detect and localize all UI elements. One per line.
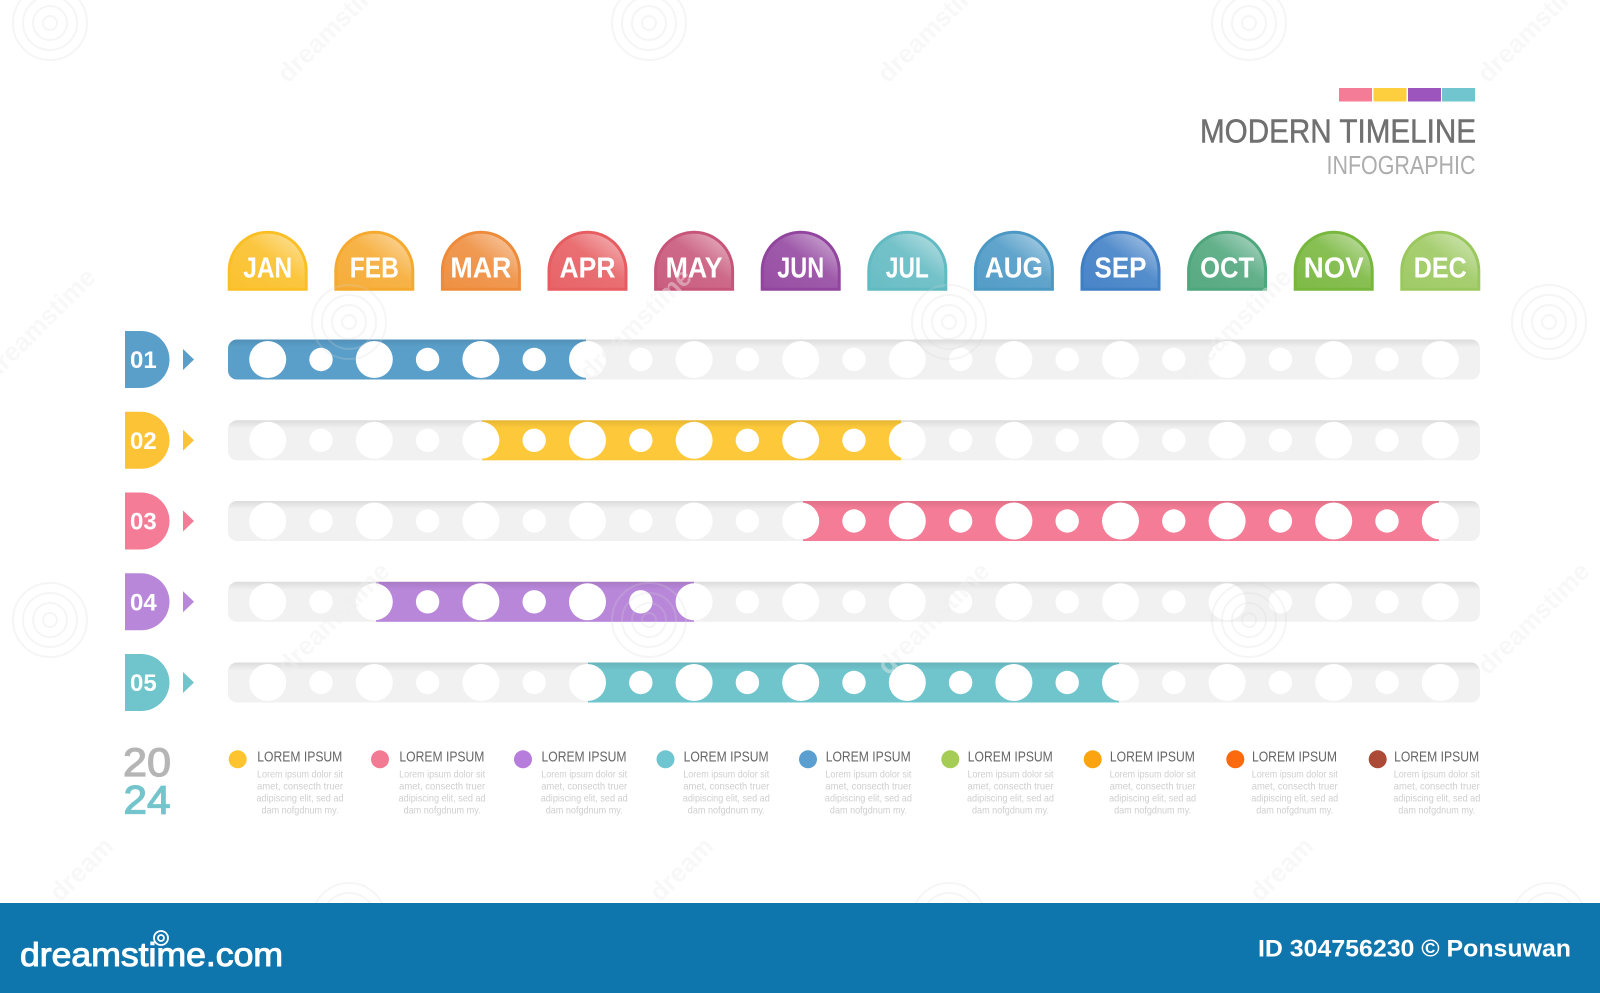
icon: logo spiral [154, 931, 168, 945]
row 01 [125, 331, 1480, 388]
legend item 4: LOREM IPSUM [684, 749, 769, 765]
month header: AUG [974, 231, 1054, 291]
month header: MAR: MAR [450, 253, 511, 285]
month header: JAN: JAN [243, 253, 292, 285]
timeline bar 03 [228, 501, 1480, 541]
watermark text: dreamstime [573, 262, 697, 386]
legend item 7: dam nofgdnum my. [1114, 804, 1191, 816]
month header: OCT: OCT [1200, 253, 1254, 285]
month header: FEB: FEB [350, 253, 399, 285]
legend item 9: Lorem ipsum dolor sit [1394, 768, 1480, 780]
month header: NOV: NOV [1304, 253, 1364, 285]
legend item 6: dam nofgdnum my. [972, 804, 1049, 816]
legend item 6: LOREM IPSUM [968, 749, 1053, 765]
month header: SEP: SEP [1094, 253, 1146, 285]
month header: JUN: JUN [777, 253, 824, 285]
legend item 7: Lorem ipsum dolor sit [1110, 768, 1196, 780]
month header: DEC [1400, 231, 1480, 291]
legend item 8: LOREM IPSUM [1252, 749, 1337, 765]
month header: FEB [334, 231, 414, 291]
legend item 8 [1226, 749, 1338, 816]
arrow 02 [183, 430, 194, 451]
month header: MAY: MAY [666, 253, 723, 285]
legend item 7: amet, consecth truer [1110, 780, 1196, 792]
month header: AUG: AUG [985, 253, 1043, 285]
legend item 6: adipiscing elit, sed ad [967, 792, 1054, 804]
arrow 01 [183, 349, 194, 370]
watermark text: dreamstime [1173, 262, 1297, 386]
legend item 9 [1369, 749, 1480, 816]
month header: JUL [867, 231, 947, 291]
row 03 [125, 492, 1480, 550]
tag 05: 05 [130, 670, 157, 697]
header: colour stripes [1339, 88, 1475, 102]
legend item 9: adipiscing elit, sed ad [1393, 792, 1480, 804]
legend item 7: adipiscing elit, sed ad [1109, 792, 1196, 804]
legend item 1: adipiscing elit, sed ad [256, 792, 344, 804]
legend item 1: dam nofgdnum my. [261, 804, 338, 816]
legend item 4: Lorem ipsum dolor sit [683, 768, 769, 780]
legend item 2: adipiscing elit, sed ad [399, 792, 486, 804]
watermark text: dreamstime [1471, 556, 1595, 680]
row 04 [125, 573, 1480, 630]
legend item 5: adipiscing elit, sed ad [825, 792, 912, 804]
legend item 9: amet, consecth truer [1394, 780, 1480, 792]
watermark text: dream [43, 831, 119, 907]
month header: JUN [761, 231, 841, 291]
year 2024: 20 [123, 741, 171, 785]
legend item 5 [799, 749, 912, 816]
timeline bar 05 [228, 662, 1480, 702]
legend item 1 [229, 749, 344, 816]
legend item 1: LOREM IPSUM [257, 749, 342, 765]
month header: MAY [654, 231, 734, 291]
watermark text: dreamstime [871, 556, 995, 680]
legend item 6 [941, 749, 1054, 816]
month header: MAR [441, 231, 521, 291]
arrow 03 [183, 510, 194, 532]
month header: SEP [1080, 231, 1160, 291]
watermark text: dreamstime [271, 556, 395, 680]
month header: NOV [1294, 231, 1374, 291]
timeline bar 02 [228, 420, 1480, 460]
legend item 4: dam nofgdnum my. [688, 804, 765, 816]
legend item 6: Lorem ipsum dolor sit [967, 768, 1054, 780]
legend item 8: amet, consecth truer [1252, 780, 1338, 792]
legend item 7 [1084, 749, 1196, 816]
legend item 2: LOREM IPSUM [399, 749, 484, 765]
legend item 7: LOREM IPSUM [1110, 749, 1195, 765]
legend item 5: amet, consecth truer [825, 780, 912, 792]
legend item 3: adipiscing elit, sed ad [541, 792, 628, 804]
footer logo text: dreamstime.com [20, 936, 283, 973]
tag 05 [125, 654, 170, 711]
legend item 4: adipiscing elit, sed ad [683, 792, 770, 804]
tag 01: 01 [130, 347, 157, 374]
legend item 1: amet, consecth truer [257, 780, 343, 792]
legend item 2: amet, consecth truer [399, 780, 486, 792]
legend item 4 [656, 749, 770, 816]
year 2024 [123, 741, 171, 822]
month header: JUL: JUL [886, 253, 929, 285]
legend item 5: LOREM IPSUM [826, 749, 911, 765]
tag 04: 04 [130, 589, 157, 616]
legend item 9: LOREM IPSUM [1394, 749, 1479, 765]
legend item 5: dam nofgdnum my. [830, 804, 907, 816]
legend item 2: Lorem ipsum dolor sit [399, 768, 485, 780]
subtitle: INFOGRAPHIC [1326, 152, 1476, 180]
tag 03 [125, 492, 170, 550]
title: MODERN TIMELINE [1200, 114, 1476, 151]
footer credit: ID 304756230 © Ponsuwan [1258, 936, 1571, 963]
legend item 9: dam nofgdnum my. [1398, 804, 1475, 816]
legend item 5: Lorem ipsum dolor sit [825, 768, 911, 780]
timeline bar 04 [228, 582, 1480, 622]
month header: JAN [228, 231, 308, 291]
tag 02: 02 [130, 428, 157, 455]
month header: APR: APR [560, 253, 616, 285]
arrow 05 [183, 672, 194, 693]
arrow 04 [183, 591, 194, 612]
legend item 3 [514, 749, 628, 816]
legend item 3: dam nofgdnum my. [546, 804, 623, 816]
month header: APR [548, 231, 628, 291]
legend item 8: Lorem ipsum dolor sit [1252, 768, 1338, 780]
month header: OCT [1187, 231, 1267, 291]
row 02 [125, 412, 1480, 469]
year 2024: 24 [124, 778, 170, 822]
legend item 3: amet, consecth truer [541, 780, 628, 792]
footer banner [0, 903, 1600, 993]
watermark text: dream [1243, 831, 1319, 907]
legend item 2: dam nofgdnum my. [404, 804, 481, 816]
row 05 [125, 654, 1480, 711]
legend item 1: Lorem ipsum dolor sit [257, 768, 343, 780]
timeline bar 01 [228, 340, 1480, 380]
tag 01 [125, 331, 170, 388]
tag 02 [125, 412, 170, 469]
month header: DEC: DEC [1414, 253, 1467, 285]
tag 04 [125, 573, 170, 630]
legend item 6: amet, consecth truer [967, 780, 1054, 792]
legend item 3: Lorem ipsum dolor sit [541, 768, 627, 780]
legend item 8: adipiscing elit, sed ad [1251, 792, 1338, 804]
tag 03: 03 [130, 508, 157, 536]
legend item 8: dam nofgdnum my. [1256, 804, 1333, 816]
legend item 2 [371, 749, 486, 816]
legend item 4: amet, consecth truer [683, 780, 770, 792]
watermark text: dream [643, 831, 719, 907]
legend item 3: LOREM IPSUM [542, 749, 626, 765]
